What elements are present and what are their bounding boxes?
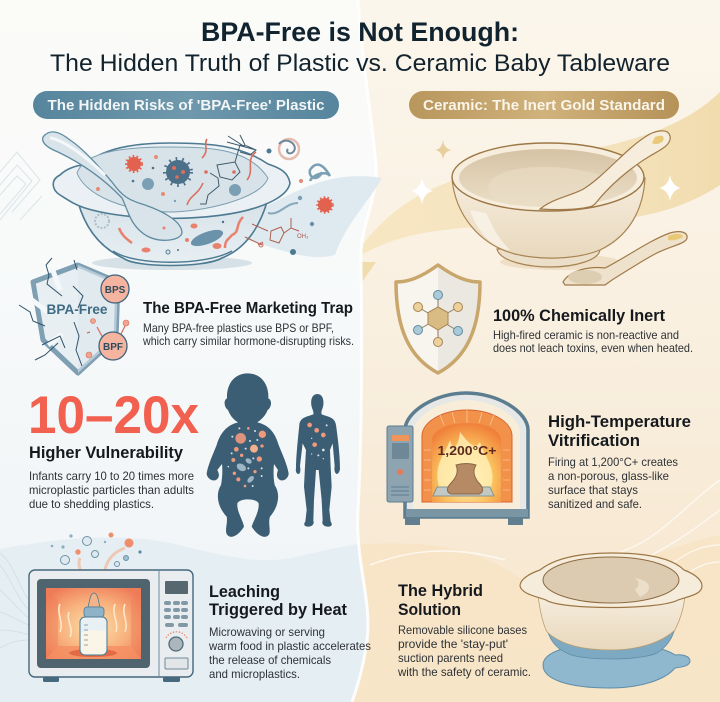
BPF badge: BPF (103, 342, 123, 353)
main heading: BPA-Free is Not Enough: (201, 17, 519, 47)
text: BPA-free marketing trap: Many BPA-free plastics use BPS or BPF, (143, 321, 334, 335)
spoon (43, 132, 182, 240)
text: high-temperature vitrification: a non-porous, glass-like (548, 469, 669, 483)
text: hybrid solution: Solution (398, 600, 461, 619)
text: hybrid solution: Removable silicone bases (398, 623, 527, 637)
text: hybrid solution: The Hybrid (398, 581, 483, 600)
text: high-temperature vitrification: sanitized and safe. (548, 497, 642, 511)
text: chemically inert: High-fired ceramic is non-reactive and (493, 328, 679, 342)
text: high-temperature vitrification: High-Temperature (548, 412, 691, 431)
text: high-temperature vitrification: Vitrification (548, 431, 640, 450)
kiln temperature label: 1,200°C+ (438, 443, 497, 458)
text: BPA-free marketing trap: which carry similar hormone-disrupting risks. (142, 334, 354, 348)
icon: microwave with bottle (29, 532, 193, 682)
text: chemically inert (493, 307, 693, 355)
panel: ceramic benefits (387, 91, 702, 688)
infant silhouette (207, 373, 289, 537)
clay vessel (447, 464, 483, 494)
panel: plastic risks (19, 91, 382, 682)
text: leaching triggered by heat: the release of chemicals (209, 653, 331, 667)
loose spoon (563, 232, 687, 285)
text: higher vulnerability: Higher Vulnerability (29, 443, 184, 462)
text: high-temperature vitrification (548, 412, 691, 511)
text: high-temperature vitrification: Firing at 1,200°C+ creates (548, 455, 678, 469)
text: higher vulnerability: microplastic particles than adults (29, 483, 194, 497)
ceramic body (538, 595, 685, 650)
text: leaching triggered by heat (208, 582, 371, 681)
particles (95, 135, 332, 255)
left section heading (33, 91, 339, 119)
text: higher vulnerability: Infants carry 10 to 20 times more (29, 469, 194, 483)
icon: cracked BPA-Free shield (19, 258, 129, 373)
text: BPA-free marketing trap: The BPA-Free Marketing Trap (143, 300, 353, 317)
rim and handles (520, 553, 702, 608)
text: chemically inert: does not leach toxins, even when heated. (493, 341, 693, 355)
icon: inert molecule shield (396, 265, 480, 373)
text: chemically inert: 100% Chemically Inert (493, 307, 665, 325)
text: higher vulnerability: due to shedding plastics. (29, 497, 154, 511)
text: hybrid solution: suction parents need (398, 651, 503, 665)
baby bottle (80, 593, 107, 655)
illustration: hybrid bowl with silicone base (520, 553, 702, 688)
text: BPA-free marketing trap (142, 300, 354, 348)
sparkles (411, 140, 681, 204)
text: leaching triggered by heat: Triggered by Heat (209, 600, 347, 619)
text: leaching triggered by heat: and microplastics. (209, 667, 300, 681)
kiln control panel (387, 426, 413, 502)
text: high-temperature vitrification: surface that stays (548, 483, 638, 497)
text: leaching triggered by heat: warm food in plastic accelerates (208, 639, 371, 653)
icon: infant and adult silhouettes (207, 373, 340, 537)
rising particles and steam (51, 532, 142, 598)
title (50, 17, 670, 77)
silicone base (543, 628, 690, 688)
spoon in bowl (540, 131, 670, 210)
icon: cracked BPA-Free shield: BPA-Free (46, 302, 108, 317)
subtitle: The Hidden Truth of Plastic vs. Ceramic Baby Tableware (50, 50, 670, 77)
illustration: plastic bowl with contaminants (43, 132, 382, 270)
BPS badge: BPS (105, 285, 126, 296)
text: hybrid solution: with the safety of ceramic. (397, 665, 531, 679)
illustration: ceramic bowl and spoons (411, 131, 687, 285)
right section heading (409, 91, 679, 119)
stat: 10-20x: 10–20x (28, 386, 200, 445)
icon: kiln (387, 393, 528, 525)
text: leaching triggered by heat: Microwaving or serving (209, 625, 325, 639)
text: hybrid solution (397, 581, 531, 679)
text: higher vulnerability (29, 443, 194, 511)
adult silhouette (296, 394, 340, 527)
text: leaching triggered by heat: Leaching (209, 582, 280, 601)
left section heading: The Hidden Risks of 'BPA-Free' Plastic (48, 98, 324, 114)
right section heading: Ceramic: The Inert Gold Standard (423, 98, 665, 114)
text: hybrid solution: provide the 'stay-put' (398, 637, 508, 651)
particles: OH₃ (297, 234, 309, 240)
control panel (159, 570, 188, 677)
